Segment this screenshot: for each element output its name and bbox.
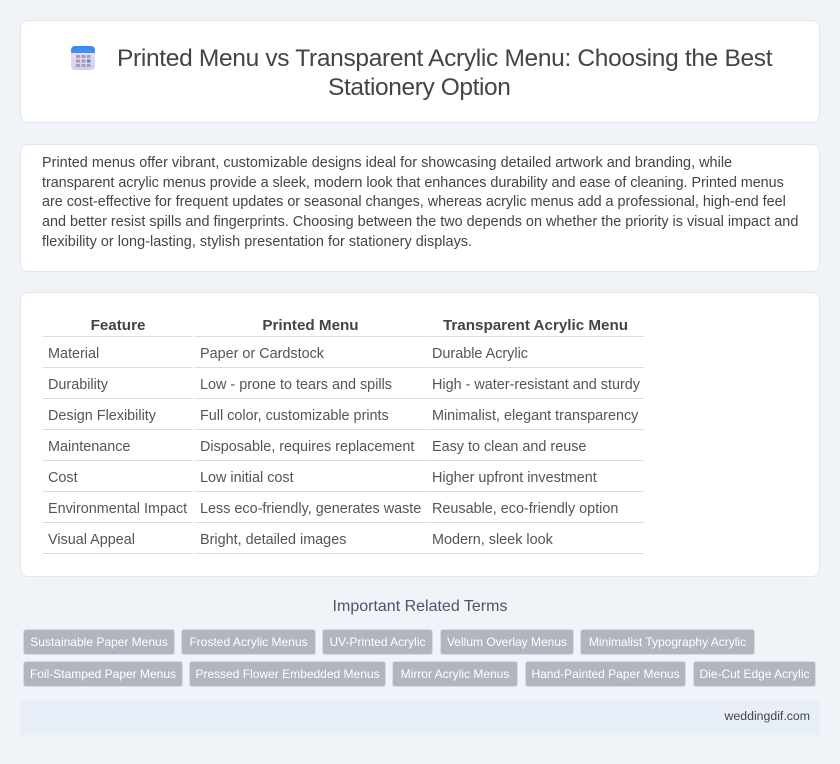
footer bar: [20, 700, 820, 735]
row: maintenance: [48, 439, 586, 455]
chip: Sustainable Paper Menus: [30, 635, 168, 649]
row: environmental impact: Environmental Impact: [48, 501, 187, 517]
panel: header: [20, 20, 820, 123]
row: maintenance: Disposable, requires replacement: [200, 439, 414, 455]
title: [117, 45, 772, 101]
chip: [322, 629, 433, 655]
row: durability: Low - prone to tears and spills: [200, 377, 392, 393]
title: Stationery Option: [328, 74, 511, 101]
row: durability: High - water-resistant and sturdy: [432, 377, 640, 393]
footer credit: weddingdif.com: [725, 709, 810, 723]
table header: printed menu: Printed Menu: [262, 317, 359, 334]
text block: introduction: [42, 155, 798, 250]
chip: [440, 629, 574, 655]
chip: [525, 661, 686, 687]
chip: Minimalist Typography Acrylic: [589, 635, 746, 649]
row: design flexibility: Minimalist, elegant transparency: [432, 408, 638, 424]
row: maintenance: Maintenance: [48, 439, 130, 455]
row: durability: Durability: [48, 377, 108, 393]
row: environmental impact: Reusable, eco-friendly option: [432, 501, 618, 517]
chip: [580, 629, 755, 655]
chip: Vellum Overlay Menus: [447, 635, 567, 649]
chip: [693, 661, 816, 687]
row: durability: [48, 377, 640, 393]
panel: comparison table: [20, 292, 820, 577]
panel: introduction: [20, 144, 820, 272]
chip: [23, 661, 183, 687]
row: cost: [48, 470, 597, 486]
row: cost: Cost: [48, 470, 78, 486]
text block: introduction: flexibility or long-lasting, stylish presentation for stationery displays.: [42, 234, 472, 250]
chip: Mirror Acrylic Menus: [401, 667, 509, 681]
row: material: Material: [48, 346, 99, 362]
chip: Die-Cut Edge Acrylic: [699, 667, 810, 681]
row: visual appeal: Modern, sleek look: [432, 532, 553, 548]
row: visual appeal: Bright, detailed images: [200, 532, 346, 548]
row: design flexibility: [48, 408, 638, 424]
row: design flexibility: Design Flexibility: [48, 408, 156, 424]
chip: Hand-Painted Paper Menus: [531, 667, 680, 681]
row: visual appeal: [48, 532, 553, 548]
chip: [23, 629, 175, 655]
chips: related terms: [23, 629, 816, 687]
chip: Foil-Stamped Paper Menus: [30, 667, 176, 681]
comparison table: [43, 336, 644, 554]
row: maintenance: Easy to clean and reuse: [432, 439, 586, 455]
row: material: Durable Acrylic: [432, 346, 528, 362]
chip: [392, 661, 518, 687]
row: design flexibility: Full color, customizable prints: [200, 408, 389, 424]
row: cost: Low initial cost: [200, 470, 294, 486]
row: environmental impact: [48, 501, 618, 517]
icon: calendar: [71, 46, 95, 70]
text block: introduction: are cost-effective for frequent updates or seasonal changes, whereas acrylic menus add a professional, high-end feel: [42, 194, 786, 210]
row: environmental impact: Less eco-friendly, generates waste: [200, 501, 421, 517]
row: material: Paper or Cardstock: [200, 346, 324, 362]
row: cost: Higher upfront investment: [432, 470, 597, 486]
title: Printed Menu vs Transparent Acrylic Menu: Choosing the Best: [117, 45, 772, 72]
heading: important related terms: Important Related Terms: [333, 598, 507, 615]
table header: transparent acrylic menu: Transparent Acrylic Menu: [443, 317, 628, 334]
row: visual appeal: Visual Appeal: [48, 532, 135, 548]
text block: introduction: transparent acrylic menus provide a sleek, modern look that enhances durability and ease of cleaning. Printed menus: [42, 175, 784, 191]
text block: introduction: Printed menus offer vibrant, customizable designs ideal for showcasing detailed artwork and branding, while: [42, 155, 732, 171]
table header: feature: Feature: [91, 317, 145, 334]
chip: Frosted Acrylic Menus: [189, 635, 308, 649]
chip: UV-Printed Acrylic: [329, 635, 426, 649]
row: material: [48, 346, 528, 362]
chip: [181, 629, 316, 655]
chip: Pressed Flower Embedded Menus: [195, 667, 380, 681]
text block: introduction: and better resist spills and fingerprints. Choosing between the two depends on whether the priority is visual impact and: [42, 214, 798, 230]
chip: [189, 661, 386, 687]
